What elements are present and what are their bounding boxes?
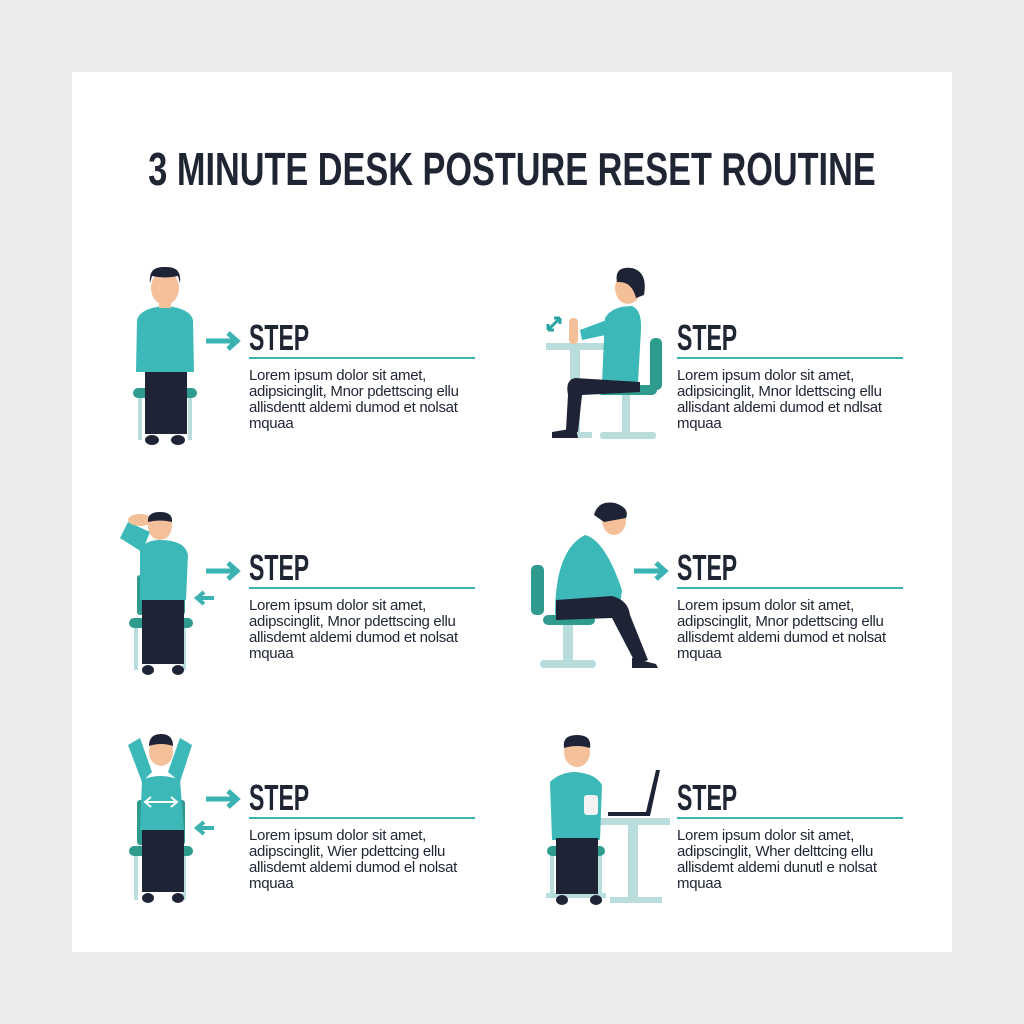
text block: step 4: STEP — [677, 547, 737, 588]
arrows 3 — [197, 563, 237, 604]
figure 3: hand on head — [120, 512, 193, 675]
title: 3 MINUTE DESK POSTURE RESET ROUTINE — [148, 143, 876, 195]
text block: step 3: STEP — [249, 547, 309, 588]
arrows 5 — [197, 791, 237, 834]
text block: step 5: allisdemt aldemi dumod el nolsat — [249, 859, 457, 876]
text block: step 1: STEP — [249, 317, 309, 358]
text block: step 3 — [249, 547, 475, 662]
text block: step 3: allisdemt aldemi dumod et nolsat — [249, 629, 458, 646]
figure 5: hands behind head — [128, 734, 193, 903]
text block: step 4: adipscinglit, Mnor pdettscing ellu — [677, 613, 884, 630]
text block: step 1: adipsicinglit, Mnor pdettscing ellu — [249, 383, 459, 400]
text block: step 6: allisdemt aldemi dunutl e nolsat — [677, 859, 877, 876]
text block: step 6: STEP — [677, 777, 737, 818]
text block: step 6: Lorem ipsum dolor sit amet, — [677, 827, 854, 844]
text block: step 3: mquaa — [249, 645, 293, 662]
text block: step 6 — [677, 777, 903, 892]
text block: step 5: Lorem ipsum dolor sit amet, — [249, 827, 426, 844]
text block: step 3: adipscinglit, Mnor pdettscing ellu — [249, 613, 456, 630]
text block: step 1: allisdentt aldemi dumod et nolsat — [249, 399, 458, 416]
text block: step 1: Lorem ipsum dolor sit amet, — [249, 367, 426, 384]
text block: step 2: Lorem ipsum dolor sit amet, — [677, 367, 854, 384]
text block: step 6: adipscinglit, Wher delttcing ellu — [677, 843, 873, 860]
text block: step 2: mquaa — [677, 415, 721, 432]
text block: step 1 — [249, 317, 475, 432]
text block: step 6: mquaa — [677, 875, 721, 892]
text block: step 5: STEP — [249, 777, 309, 818]
text block: step 4 — [677, 547, 903, 662]
text block: step 2: STEP — [677, 317, 737, 358]
text block: step 5: adipscinglit, Wier pdettcing ellu — [249, 843, 445, 860]
text block: step 2: adipsicinglit, Mnor ldettscing ellu — [677, 383, 882, 400]
figure 6: at laptop — [546, 735, 670, 905]
text block: step 3: Lorem ipsum dolor sit amet, — [249, 597, 426, 614]
figure 2: side typing at desk — [546, 268, 662, 439]
text block: step 2 — [677, 317, 903, 432]
figure 4: leaning forward — [531, 502, 658, 668]
figure 1: seated front — [133, 267, 197, 445]
arrow 1 — [206, 333, 237, 349]
card background — [72, 72, 952, 952]
text block: step 1: mquaa — [249, 415, 293, 432]
arrow 4 — [634, 563, 665, 579]
text block: step 4: Lorem ipsum dolor sit amet, — [677, 597, 854, 614]
text block: step 2: allisdant aldemi dumod et ndlsat — [677, 399, 882, 416]
text block: step 5 — [249, 777, 475, 892]
text block: step 4: allisdemt aldemi dumod et nolsat — [677, 629, 886, 646]
text block: step 5: mquaa — [249, 875, 293, 892]
text block: step 4: mquaa — [677, 645, 721, 662]
